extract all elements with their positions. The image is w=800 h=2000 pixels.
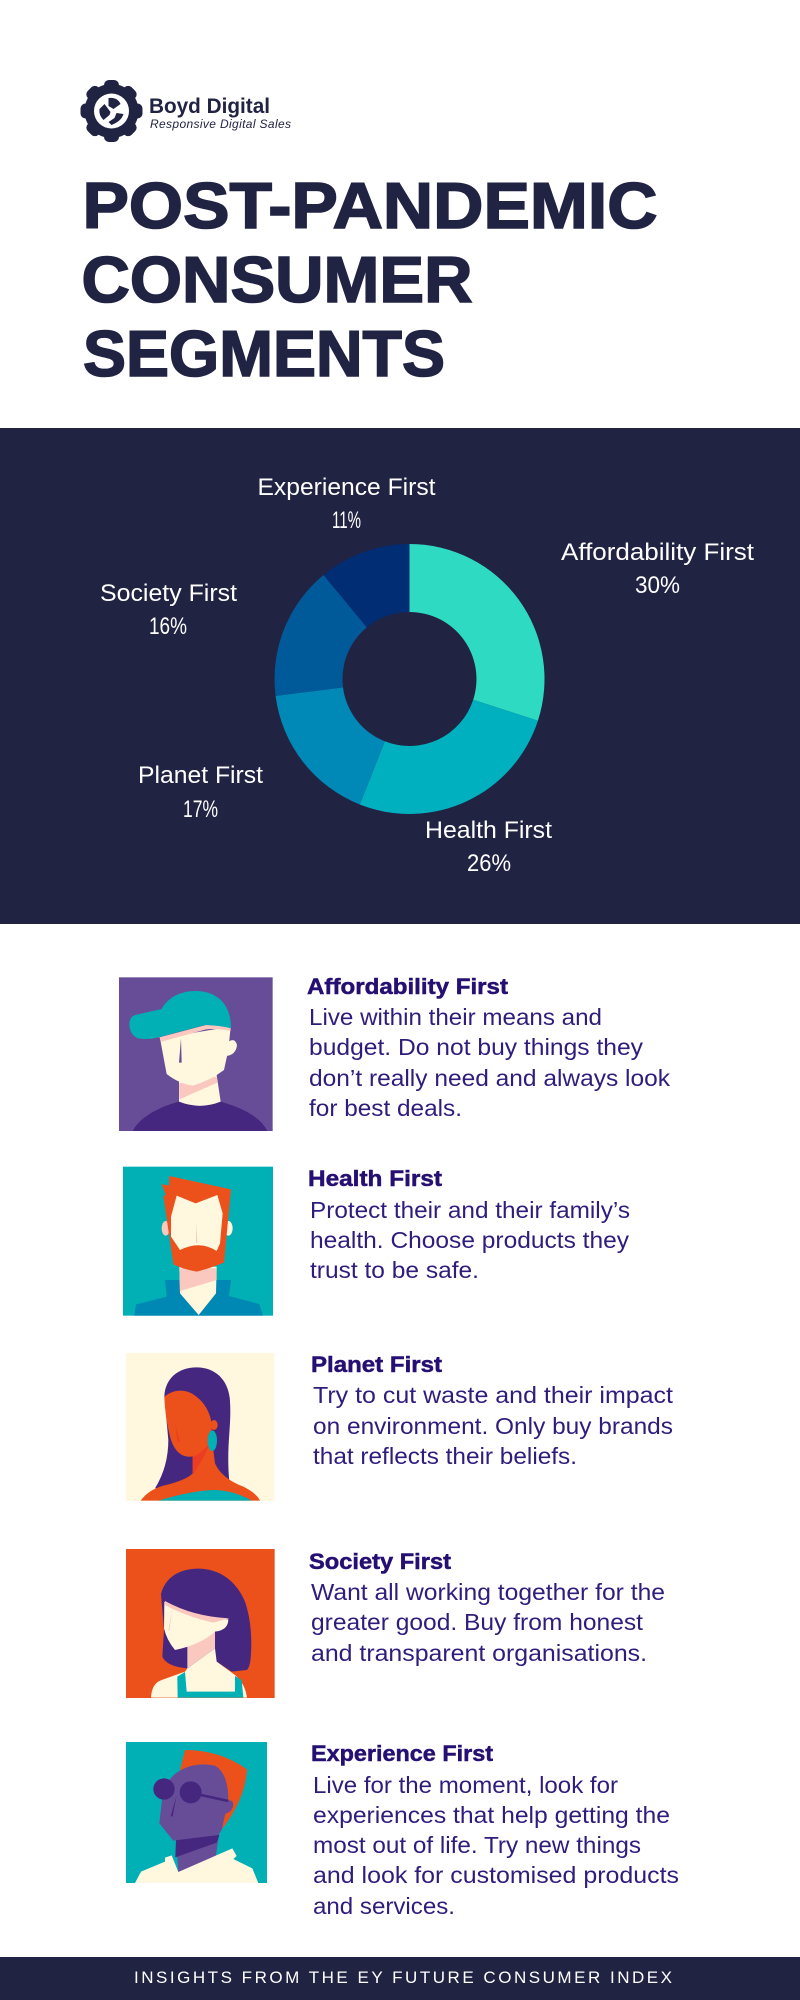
text: Affordability First: budget. Do not buy things they — [309, 1034, 644, 1060]
label: Experience First: 11% — [332, 507, 361, 534]
text: Planet First: Try to cut waste and their impact — [313, 1382, 674, 1408]
logo: Boyd Digital — [80, 80, 291, 142]
label: Experience First: Experience First — [258, 474, 436, 501]
icon: Experience First avatar — [126, 1742, 267, 1883]
slice: Health First 26% — [360, 700, 538, 814]
text: Experience First: most out of life. Try new things — [313, 1832, 641, 1858]
label: Planet First — [138, 762, 263, 823]
text: Affordability First — [307, 974, 671, 1121]
text: Planet First: that reflects their beliefs. — [313, 1443, 577, 1469]
text: Society First: Society First — [309, 1549, 452, 1574]
text: Society First: and transparent organisations. — [311, 1640, 647, 1666]
text: Affordability First: Live within their means and — [309, 1004, 602, 1030]
logo name: Boyd Digital — [149, 95, 270, 118]
label: Planet First: Planet First — [138, 762, 263, 789]
text: Affordability First: Affordability First — [307, 974, 509, 999]
label: Society First: Society First — [100, 580, 237, 607]
icon: Health First avatar — [123, 1167, 273, 1316]
text: Planet First: Planet First — [311, 1352, 443, 1377]
label: Society First: 16% — [149, 613, 187, 640]
text: Society First — [309, 1549, 665, 1666]
text: Experience First: and services. — [313, 1893, 455, 1919]
title — [82, 169, 658, 390]
label: Affordability First: 30% — [635, 572, 680, 599]
text: Affordability First: don’t really need and always look — [309, 1065, 671, 1091]
panel: donut chart band — [0, 428, 800, 924]
text: Planet First — [311, 1352, 674, 1469]
text: Society First: Want all working together for the — [311, 1579, 665, 1605]
label: Health First: Health First — [425, 817, 552, 844]
text: Planet First: on environment. Only buy brands — [313, 1413, 673, 1439]
title: POST-PANDEMIC — [82, 169, 658, 242]
label: Experience First — [258, 474, 436, 534]
text: Health First: Protect their and their family’s — [310, 1197, 630, 1223]
logo tagline: Responsive Digital Sales — [150, 117, 291, 131]
footer text: INSIGHTS FROM THE EY FUTURE CONSUMER INDEX — [134, 1968, 672, 1987]
icon: Society First avatar — [126, 1549, 275, 1698]
text: Experience First — [311, 1741, 679, 1919]
title: CONSUMER — [82, 243, 472, 316]
text: Experience First: Live for the moment, look for — [313, 1772, 618, 1798]
label: Planet First: 17% — [183, 796, 218, 823]
label: Health First: 26% — [467, 850, 511, 877]
text: Affordability First: for best deals. — [309, 1095, 462, 1121]
label: Society First — [100, 580, 237, 640]
label: Affordability First — [561, 539, 754, 599]
text: Experience First: Experience First — [311, 1741, 494, 1766]
icon: Affordability First avatar — [119, 977, 273, 1131]
slice: Society First 16% — [275, 575, 367, 696]
title: SEGMENTS — [83, 317, 445, 390]
slice: Experience First 11% — [324, 544, 410, 627]
icon: gear — [80, 80, 142, 142]
slice: Planet First 17% — [276, 687, 385, 804]
donut chart — [275, 544, 545, 814]
label: Affordability First: Affordability First — [561, 539, 754, 566]
text: Health First: trust to be safe. — [310, 1257, 479, 1283]
footer band — [0, 1957, 800, 2000]
text: Experience First: and look for customised products — [313, 1862, 679, 1888]
text: Health First: Health First — [308, 1166, 443, 1191]
text: Society First: greater good. Buy from honest — [311, 1609, 644, 1635]
text: Health First: health. Choose products they — [310, 1227, 630, 1253]
label: Health First — [425, 817, 552, 877]
slice: Affordability First 30% — [410, 544, 545, 721]
text: Experience First: experiences that help getting the — [313, 1802, 670, 1828]
text: Health First — [308, 1166, 630, 1283]
icon: Planet First avatar — [126, 1353, 274, 1501]
